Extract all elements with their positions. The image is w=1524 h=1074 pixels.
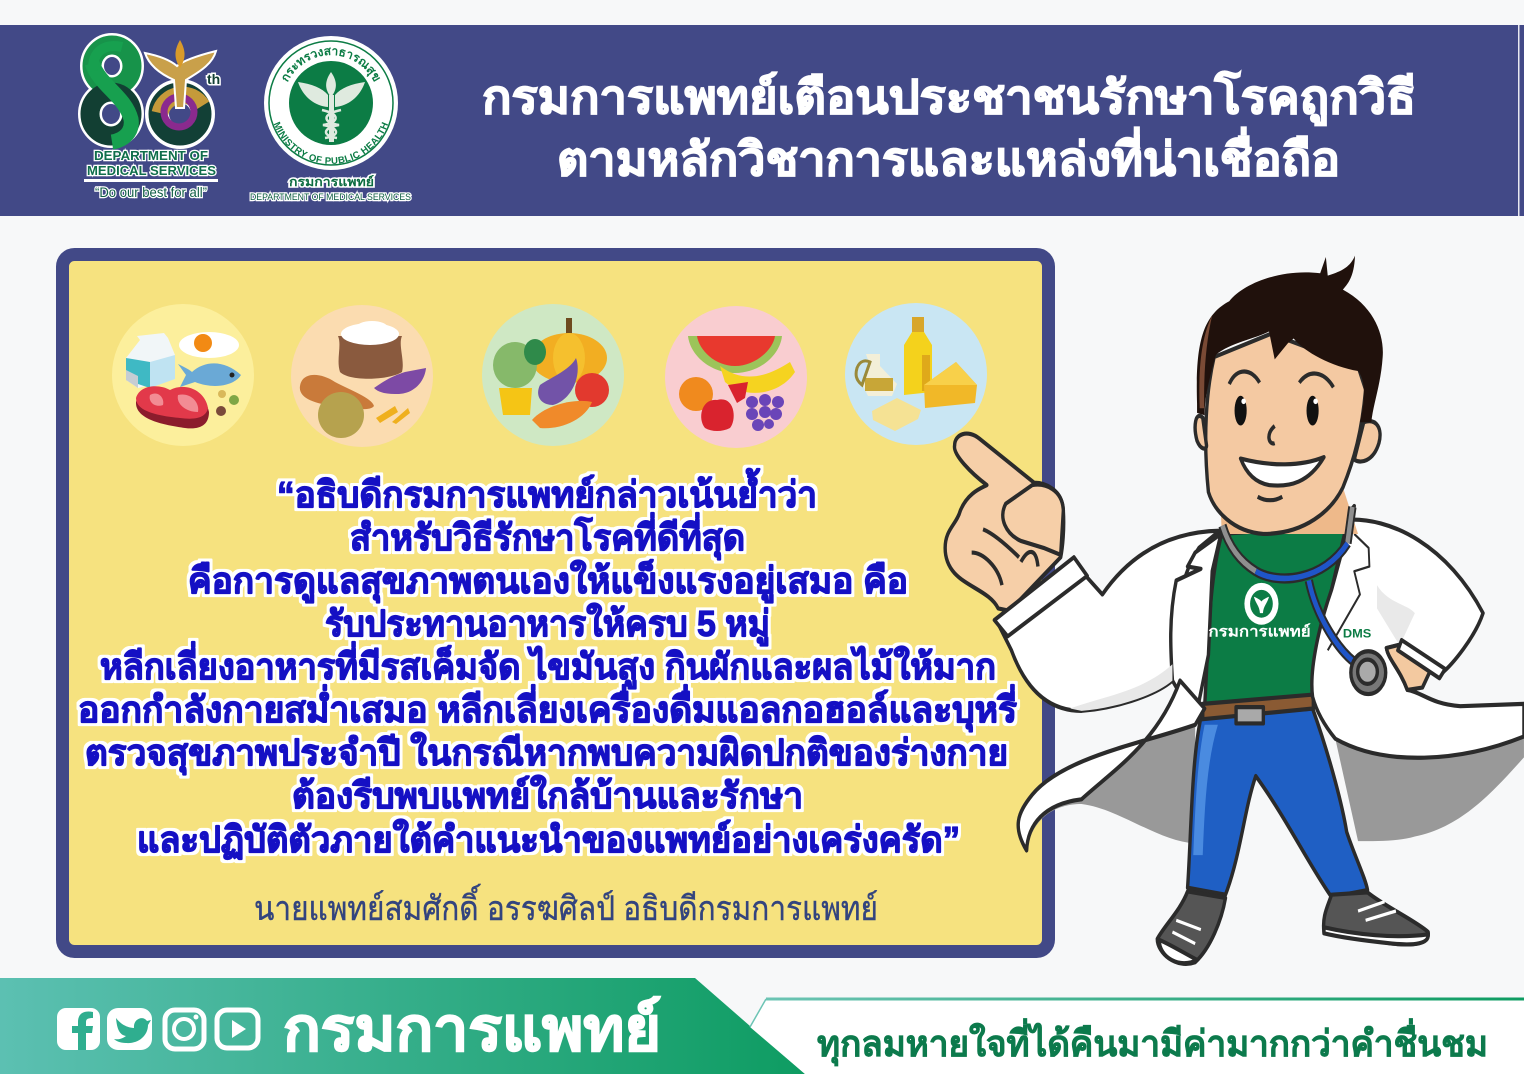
- quote text: และปฏิบัติตัวภายใต้คำแนะนำของแพทย์อย่างเคร่งครัด”: [137, 818, 960, 860]
- character: doctor mascot: [945, 256, 1524, 964]
- logo: Ministry of Public Health seal: [250, 36, 412, 204]
- quote text: “อธิบดีกรมการแพทย์กล่าวเน้นย้ำว่า: [277, 468, 817, 515]
- quote text: ออกกำลังกายสม่ำเสมอ หลีกเลี่ยงเครื่องดื่มแอลกอฮอล์และบุหรี่: [78, 684, 1018, 733]
- logo: Ministry of Public Health seal: MINISTRY OF PUBLIC HEALTH: [274, 122, 388, 164]
- logo: 80th anniversary Department of Medical Services: DEPARTMENT OF: [94, 148, 208, 163]
- quote text: [78, 468, 1018, 860]
- panel: quote: [62, 254, 1048, 952]
- icon: vegetable food group: [482, 304, 624, 446]
- quote text: ตรวจสุขภาพประจำปี ในกรณีหากพบความผิดปกติของร่างกาย: [85, 731, 1008, 776]
- logo: Ministry of Public Health seal: DEPARTMENT OF MEDICAL SERVICES: [250, 192, 411, 202]
- icon: carbohydrate food group: [291, 305, 433, 447]
- quote text: สำหรับวิธีรักษาโรคที่ดีที่สุด: [350, 512, 745, 561]
- footer: slogan: ทุกลมหายใจที่ได้คืนมามีค่ามากกว่าคำชื่นชม: [817, 1018, 1488, 1067]
- logo: 80th anniversary Department of Medical Services: th: [207, 71, 220, 87]
- header band: [0, 25, 1524, 216]
- attribution: นายแพทย์สมศักดิ์ อรรฆศิลป์ อธิบดีกรมการแพทย์: [254, 883, 878, 928]
- icon: fruit food group: [665, 306, 807, 448]
- footer: department name: กรมการแพทย์: [283, 996, 661, 1063]
- quote text: คือการดูแลสุขภาพตนเองให้แข็งแรงอยู่เสมอ คือ: [188, 558, 908, 604]
- quote text: รับประทานอาหารให้ครบ 5 หมู่: [325, 602, 770, 647]
- character: doctor mascot: DMS: [1343, 627, 1371, 641]
- logo: Ministry of Public Health seal: กรมการแพทย์: [289, 175, 374, 189]
- social icons: [57, 1008, 258, 1050]
- logo: 80th anniversary Department of Medical Services: [84, 40, 220, 200]
- footer: green banner: [0, 978, 805, 1074]
- title: [482, 70, 1416, 185]
- icon: fat food group: [845, 303, 987, 445]
- quote text: หลีกเลี่ยงอาหารที่มีรสเค็มจัด ไขมันสูง กินผักและผลไม้ให้มาก: [100, 641, 996, 690]
- footer: white slogan panel: [750, 998, 1524, 1074]
- title: กรมการแพทย์เตือนประชาชนรักษาโรคถูกวิธี: [482, 70, 1416, 126]
- logo: Ministry of Public Health seal: กระทรวงสาธารณสุข: [282, 48, 380, 82]
- logo: 80th anniversary Department of Medical Services: “Do our best for all”: [95, 184, 207, 200]
- title: ตามหลักวิชาการและแหล่งที่น่าเชื่อถือ: [557, 127, 1340, 185]
- quote text: ต้องรีบพบแพทย์ใกล้บ้านและรักษา: [292, 774, 803, 816]
- icon: protein food group: [112, 304, 254, 446]
- logo: 80th anniversary Department of Medical Services: MEDICAL SERVICES: [87, 163, 216, 178]
- character: doctor mascot: กรมการแพทย์: [1208, 622, 1311, 640]
